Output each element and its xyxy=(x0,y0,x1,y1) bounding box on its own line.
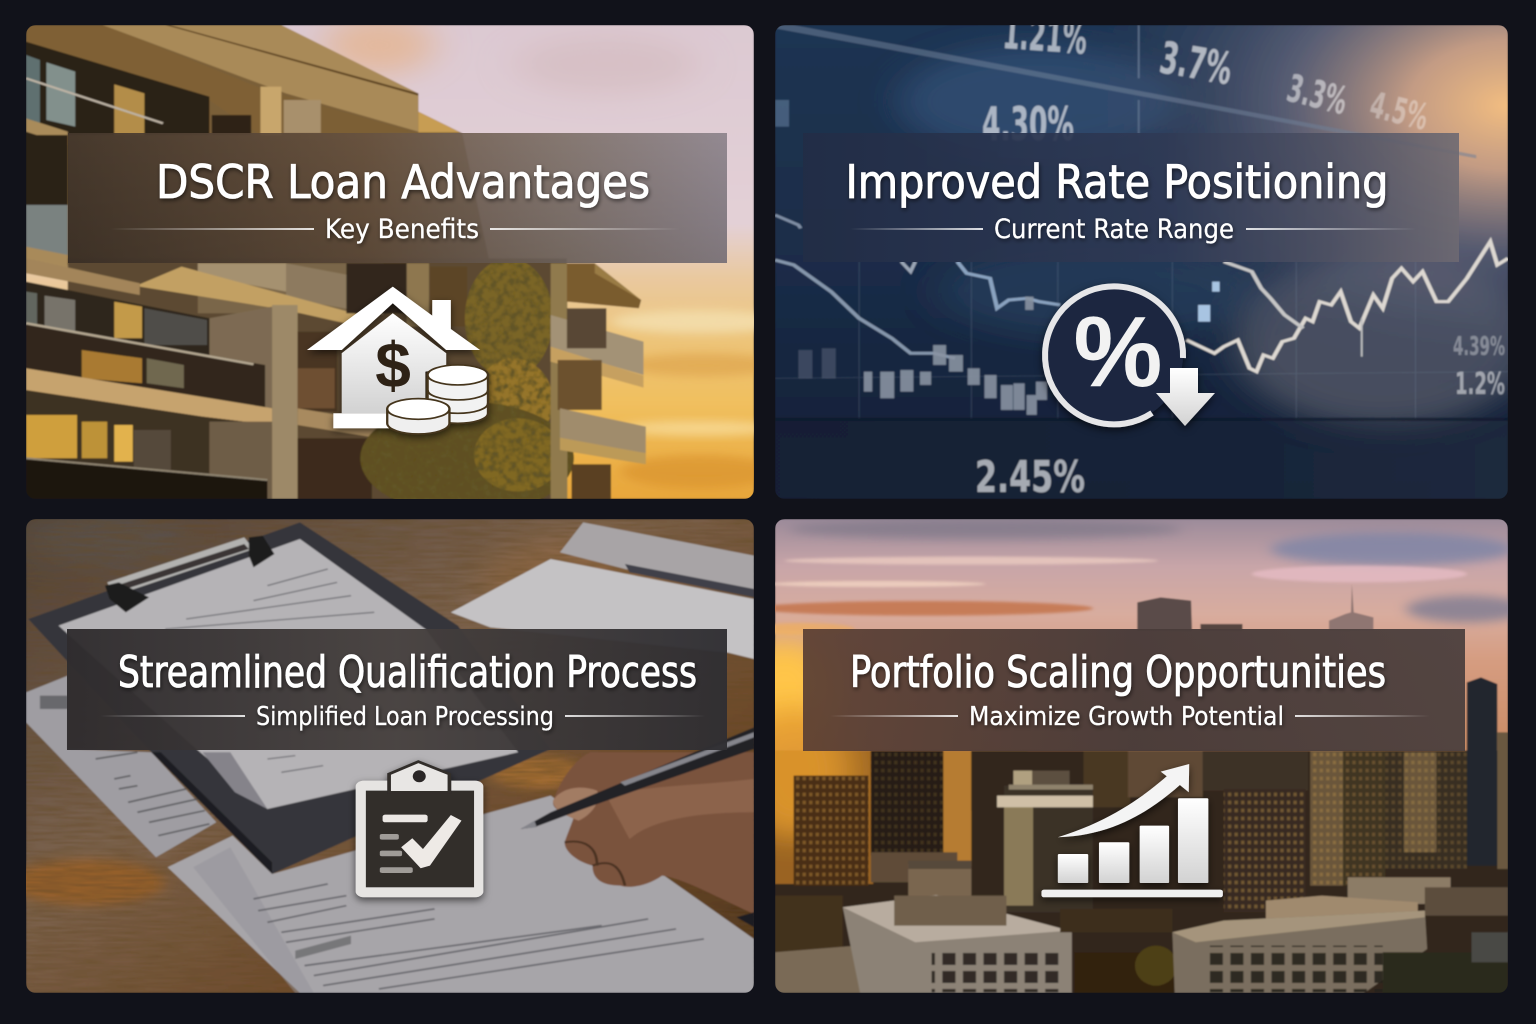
photo: financial rate board: 3.3% xyxy=(1283,66,1352,123)
heading: DSCR Loan Advantages xyxy=(156,155,650,209)
tree xyxy=(360,258,574,515)
banner: streamlined qualification process xyxy=(67,629,727,750)
icon: house with dollar and coins xyxy=(307,287,488,434)
icon: percent circle with down arrow xyxy=(1045,286,1215,426)
upper floors xyxy=(66,34,487,260)
photo: financial rate board xyxy=(775,8,1532,503)
icon: clipboard with check mark xyxy=(356,762,483,897)
panel: streamlined qualification process xyxy=(7,509,754,993)
photo: city skyline at sunset xyxy=(728,519,1528,993)
photo: financial rate board: 2.45% xyxy=(975,452,1085,503)
foreground left xyxy=(871,852,957,882)
subheading: Key Benefits xyxy=(325,214,479,245)
photo: financial rate board: 1.2% xyxy=(1455,367,1505,402)
panel: improved rate positioning xyxy=(775,8,1532,503)
wall behind banner base xyxy=(68,258,567,499)
photo: financial rate board: 3.7% xyxy=(1156,33,1236,95)
middle floors xyxy=(26,258,140,295)
photo: financial rate board: 4.5% xyxy=(1366,85,1432,139)
subheading: Maximize Growth Potential xyxy=(969,702,1284,732)
panel: portfolio scaling opportunities xyxy=(728,519,1528,993)
icon: percent circle with down arrow: % xyxy=(1074,296,1162,408)
banner: portfolio scaling opportunities xyxy=(803,629,1465,751)
foreground centre xyxy=(1060,909,1172,932)
central building xyxy=(1004,786,1093,912)
heading: Streamlined Qualification Process xyxy=(118,647,697,698)
icon: house with dollar and coins: $ xyxy=(375,329,411,401)
photo: apartment building at sunset xyxy=(26,15,787,515)
back paper right xyxy=(560,522,754,596)
photo: financial rate board: 4.30% xyxy=(982,97,1074,151)
clip xyxy=(107,537,254,596)
ground floor xyxy=(26,389,242,474)
subheading: Current Rate Range xyxy=(994,214,1234,245)
bottom paper xyxy=(168,796,754,993)
panel: DSCR loan advantages xyxy=(26,15,787,515)
photo: clipboard and paperwork on wooden desk xyxy=(7,509,754,993)
clipboard board xyxy=(28,522,551,874)
icon: growth bar chart with arrow xyxy=(1041,764,1223,897)
left paper xyxy=(26,676,216,857)
pen xyxy=(520,727,754,829)
subheading: Simplified Loan Processing xyxy=(256,702,554,732)
photo: financial rate board: 4.39% xyxy=(1453,332,1505,362)
hand xyxy=(553,752,754,914)
heading: Improved Rate Positioning xyxy=(846,155,1388,209)
photo: financial rate board: 1.21% xyxy=(1001,8,1089,65)
right balconies xyxy=(551,263,567,499)
banner: improved rate positioning xyxy=(803,133,1459,262)
skyline base xyxy=(775,751,1508,993)
banner: DSCR loan advantages xyxy=(68,133,727,263)
foreground right xyxy=(1348,877,1451,904)
heading: Portfolio Scaling Opportunities xyxy=(850,647,1386,698)
